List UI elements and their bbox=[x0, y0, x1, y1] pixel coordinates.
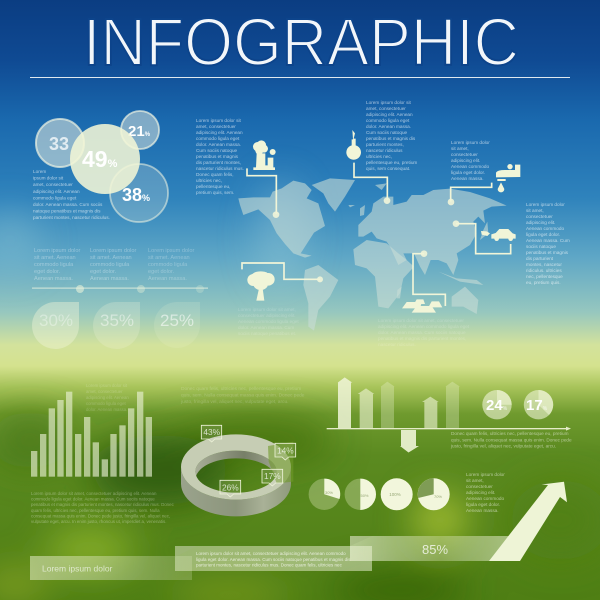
column text: eget dolor. bbox=[34, 269, 61, 275]
panel: world map bbox=[196, 100, 570, 347]
map text: flask: ultricies nec, bbox=[366, 154, 392, 159]
ring top text: Donec quam felis, ultricies nec, pellentesque eu, pretium bbox=[181, 386, 301, 392]
bar chart top text: adipiscing elit. Aenean bbox=[86, 395, 129, 400]
panel: arrow chart bbox=[327, 377, 572, 452]
map text: car: adipiscing elit. bbox=[526, 220, 555, 225]
drop 30%: 30% bbox=[39, 311, 73, 330]
bubble description: Lorem bbox=[33, 169, 46, 174]
map text: car: penatibus et magnis bbox=[526, 250, 569, 255]
small pies text: Lorem ipsum dolor bbox=[466, 472, 505, 477]
bubble description: commodo ligula eget bbox=[33, 195, 77, 200]
bubble description: adipiscing elit. Aenean bbox=[33, 189, 80, 194]
map text: tree: consectetuer adipiscing elit. bbox=[238, 313, 296, 318]
bar chart top text: amet, consectetuer bbox=[86, 389, 123, 394]
ring top text: quis, sem. Nulla consequat massa quis enim. Donec pede bbox=[181, 392, 305, 398]
ring labels: 43% bbox=[203, 427, 221, 437]
map text: faucet: adipiscing elit. bbox=[451, 158, 480, 163]
map text: factory: adipiscing elit. Aenean bbox=[196, 130, 243, 135]
column text bbox=[34, 248, 194, 282]
big arrow bbox=[489, 482, 567, 561]
map text: flask: amet, consectetuer bbox=[366, 106, 406, 111]
pie 17: 17% bbox=[526, 397, 548, 414]
pie 24 bbox=[482, 390, 512, 419]
map text: flask: Cum sociis natoque bbox=[366, 130, 408, 135]
map text: flask: quis, sem consequat. bbox=[366, 166, 410, 171]
map text: tree: sociis natoque penatibus et. bbox=[238, 331, 296, 336]
ribbon: text: ligula eget dolor. Aenean massa. Cum sociis natoque penatibus et magnis dis bbox=[196, 557, 351, 562]
85% label: 85% bbox=[422, 542, 448, 557]
map text: car: ridiculus. ultricies bbox=[526, 268, 562, 273]
map text: car: sociis natoque bbox=[526, 244, 556, 249]
pie 70% bbox=[418, 478, 450, 510]
map text: car: montes, nascetur bbox=[526, 262, 562, 267]
column text: Aenean massa. bbox=[34, 276, 73, 282]
bar chart top text: dolor. Aenean massa. bbox=[86, 407, 127, 412]
map text: factory: dis parturient montes, bbox=[196, 160, 241, 165]
ribbon: text: Lorem ipsum dolor sit amet, consectetuer adipiscing elit. Aenean commodo bbox=[196, 551, 346, 556]
map text: car: nec, pellentesque bbox=[526, 274, 563, 279]
bar chart bottom text: vulputate eget, arcu. In enim justo, rhoncus ut, imperdiet a, venenatis. bbox=[31, 519, 166, 524]
small pies text: Aenean commodo bbox=[466, 496, 504, 501]
ribbon: text: parturient montes, nascetur ridiculus mus. Donec quam felis, ultricies nec bbox=[196, 563, 343, 568]
map text: car: ligula eget dolor. bbox=[526, 232, 560, 237]
bubble 38%: 38% bbox=[122, 185, 150, 205]
column text: sit amet. Aenean bbox=[34, 255, 76, 261]
bar chart top text: Lorem ipsum dolor sit bbox=[86, 383, 128, 388]
map text: stumps: adipiscing elit. Aenean commodo ligula eget bbox=[378, 324, 470, 329]
bar chart bbox=[31, 392, 152, 477]
bubble description: dolor. Aenean massa. Cum sociis bbox=[33, 202, 103, 207]
map text: factory: dolor. Aenean massa. bbox=[196, 142, 241, 147]
map text: factory: Lorem ipsum dolor sit bbox=[196, 118, 242, 123]
map text: faucet: Lorem ipsum dolor bbox=[451, 140, 490, 145]
map text: car: Lorem ipsum dolor bbox=[526, 202, 565, 207]
map text: tree: Aenean commodo ligula eget bbox=[238, 319, 299, 324]
ring labels: 26% bbox=[222, 482, 239, 492]
map text: faucet: Aenean commodo bbox=[451, 164, 489, 169]
ring labels: 14% bbox=[277, 445, 294, 455]
pie 100%: 100% bbox=[389, 492, 401, 497]
map bbox=[238, 178, 507, 331]
pie 24: 24% bbox=[486, 397, 508, 414]
small pies text: consectetuer bbox=[466, 484, 493, 489]
map text: factory: Cum sociis natoque bbox=[196, 148, 238, 153]
3D ring bbox=[181, 434, 293, 516]
column text: eget dolor. bbox=[148, 269, 175, 275]
map text: factory: ultricies nec, bbox=[196, 178, 222, 183]
icon: flask bbox=[346, 130, 361, 160]
map text: flask: nascetur ridiculus bbox=[366, 148, 403, 153]
map text: factory: amet, consectetuer bbox=[196, 124, 236, 129]
axis bbox=[327, 427, 571, 431]
map text: car: Aenean massa. Cum bbox=[526, 238, 570, 243]
ribbon: Lorem ipsum dolor: Lorem ipsum dolor bbox=[42, 564, 113, 574]
map text: car: sit amet, bbox=[526, 208, 544, 213]
pie 100% bbox=[381, 478, 413, 510]
bar chart bottom text: Lorem ipsum dolor sit amet, consectetuer adipiscing elit. Aenean bbox=[31, 491, 157, 496]
column text: commodo ligula bbox=[90, 262, 130, 268]
arrow ribbon 85% bbox=[350, 482, 567, 561]
bar chart top text: commodo ligula eget bbox=[86, 401, 126, 406]
map text: tree: Lorem ipsum dolor sit amet, bbox=[238, 307, 296, 312]
bar chart bottom text: commodo ligula eget dolor. Aenean massa. Cum sociis natoque bbox=[31, 497, 155, 502]
timeline bbox=[32, 285, 208, 293]
map text: flask: commodo ligula eget bbox=[366, 118, 410, 123]
arrow chart text: justo, fringilla vel, aliquet nec, vulputate eget, arcu. bbox=[450, 444, 556, 449]
arrow chart text: quis, sem. Nulla consequat massa quis enim. Donec pede bbox=[451, 437, 572, 442]
drop 25%: 25% bbox=[160, 311, 194, 330]
pie 30%: 30% bbox=[325, 490, 333, 495]
map text: stumps: Lorem ipsum dolor sit amet, consectetuer bbox=[378, 318, 464, 323]
pie 50% bbox=[345, 479, 376, 510]
map text: factory: Donec quam felis, bbox=[196, 172, 234, 177]
map text: flask: adipiscing elit. Aenean bbox=[366, 112, 413, 117]
column text: Aenean massa. bbox=[90, 276, 129, 282]
panel: percentage bubbles bbox=[33, 111, 168, 222]
small pies text: ligula eget dolor. bbox=[466, 502, 500, 507]
map text: stumps: dolor. Aenean massa. Cum sociis natoque bbox=[378, 330, 466, 335]
map text: flask: pellentesque eu, pretium bbox=[366, 160, 417, 165]
drop 25% bbox=[154, 302, 200, 348]
bubble 21%: 21% bbox=[128, 123, 151, 140]
icon: factory bbox=[253, 140, 276, 170]
arrow chart text: Donec quam felis, ultricies nec, pellentesque eu, pretium bbox=[451, 431, 569, 436]
map text: stumps: nascetur ridiculus. bbox=[378, 342, 416, 347]
map text: flask: parturient montes, bbox=[366, 142, 404, 147]
map text: faucet: Aenean massa. bbox=[451, 176, 484, 181]
panel: ring chart bbox=[180, 386, 305, 516]
column text: commodo ligula bbox=[34, 262, 74, 268]
bubble description: natoque penatibus et magnis dis bbox=[33, 209, 101, 214]
small pies text: sit amet, bbox=[466, 478, 484, 483]
map text: tree: dolor. Aenean massa. Cum bbox=[238, 325, 294, 330]
ribbon: text bbox=[175, 546, 372, 571]
drop 30% bbox=[32, 302, 79, 349]
column text: Lorem ipsum dolor bbox=[148, 248, 194, 254]
column text: Lorem ipsum dolor bbox=[34, 248, 80, 254]
map text: factory: commodo ligula eget bbox=[196, 136, 240, 141]
pie 17 bbox=[524, 390, 553, 419]
bubble description: ipsum dolor sit bbox=[33, 176, 64, 181]
ribbon: Lorem ipsum dolor bbox=[30, 556, 192, 580]
small pies text: adipiscing elit. bbox=[466, 490, 495, 495]
map text: factory: pellentesque eu, bbox=[196, 184, 230, 189]
map text: car: eu, pretium quis. bbox=[526, 280, 561, 285]
panel: timeline with drops bbox=[32, 248, 208, 349]
title: INFOGRAPHIC bbox=[83, 5, 519, 80]
map text: faucet: ligula eget dolor. bbox=[451, 170, 485, 175]
drop 35% bbox=[93, 302, 140, 349]
icon: tree stumps bbox=[402, 299, 442, 313]
bubble 49%: 49% bbox=[82, 146, 118, 172]
pie 70%: 70% bbox=[434, 494, 442, 499]
map text: faucet: sit amet, bbox=[451, 146, 469, 151]
pie 50%: 50% bbox=[360, 493, 369, 498]
map text: factory: nascetur ridiculus mus. bbox=[196, 166, 244, 171]
map text: stumps: penatibus et magnis dis parturient montes, bbox=[378, 336, 466, 341]
bubble 33%: 33 bbox=[49, 134, 69, 154]
icon: car bbox=[481, 229, 516, 241]
pie 30% bbox=[309, 479, 340, 510]
map text: flask: penatibus et magnis dis bbox=[366, 136, 416, 141]
map text: flask: Lorem ipsum dolor sit bbox=[366, 100, 412, 105]
column text: sit amet. Aenean bbox=[90, 255, 132, 261]
down arrow bbox=[400, 430, 419, 452]
map text: car: consectetuer bbox=[526, 214, 553, 219]
ring top text: justo, fringilla vel, aliquet nec, vulputate eget, arcu. bbox=[180, 399, 288, 405]
bar chart bottom text: penatibus et magnis dis parturient montes, nascetur ridiculus mus. Donec bbox=[31, 502, 175, 507]
map text: flask: dolor. Aenean massa. bbox=[366, 124, 411, 129]
bar chart bottom text: quam felis, ultricies nec, pellentesque eu, pretium quis, sem. Nulla bbox=[31, 508, 160, 513]
panel: small pies bbox=[309, 472, 505, 513]
bar chart bottom text: consequat massa quis enim. Donec pede justo, fringilla vel, aliquet nec, bbox=[31, 513, 170, 518]
column text: Lorem ipsum dolor bbox=[90, 248, 136, 254]
up arrows bbox=[338, 377, 460, 428]
bubble description: amet, consectetuer bbox=[33, 182, 73, 187]
column text: sit amet. Aenean bbox=[148, 255, 190, 261]
bubble description: parturient montes, nascetur ridiculus. bbox=[33, 215, 110, 220]
small pies text: Aenean massa. bbox=[466, 508, 499, 513]
icon: tree bbox=[247, 271, 275, 301]
ring labels: 17% bbox=[264, 471, 281, 481]
column text: commodo ligula bbox=[148, 262, 188, 268]
ring labels bbox=[201, 425, 296, 497]
map text: factory: penatibus et magnis bbox=[196, 154, 239, 159]
map text: car: Aenean commodo bbox=[526, 226, 564, 231]
icon: faucet bbox=[496, 164, 520, 192]
column text: Aenean massa. bbox=[148, 276, 187, 282]
map text: factory: pretium quis, sem. bbox=[196, 190, 234, 195]
map text: faucet: consectetuer bbox=[451, 152, 478, 157]
column text: eget dolor. bbox=[90, 269, 117, 275]
drop 35%: 35% bbox=[100, 311, 134, 330]
connectors bbox=[242, 163, 511, 306]
map text: car: dis parturient bbox=[526, 256, 554, 261]
